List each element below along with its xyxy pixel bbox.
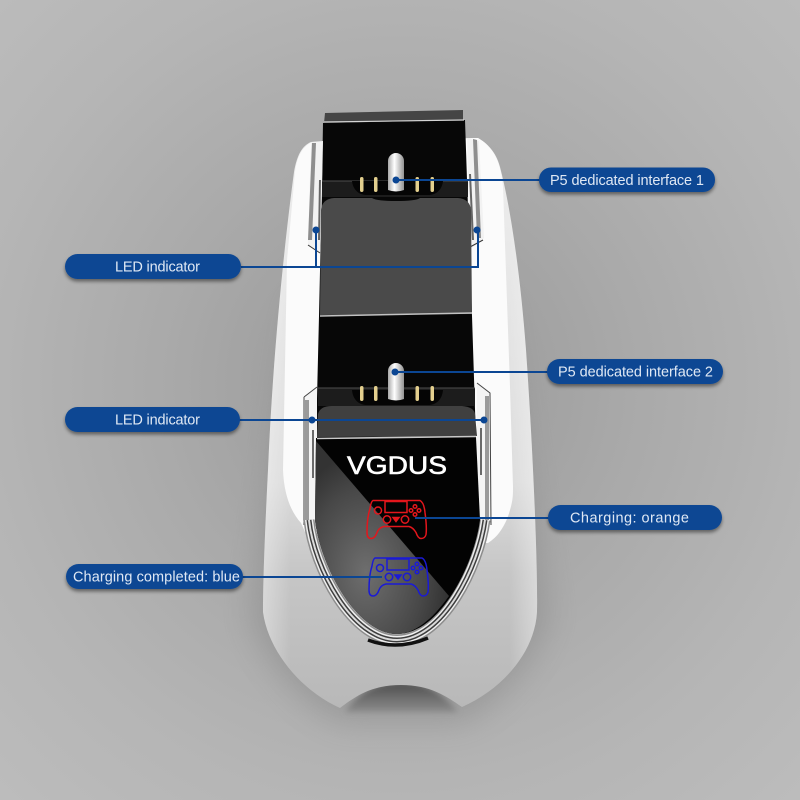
upper pin seat [352,181,443,195]
callout: LED indicator lower: LED indicator [115,412,200,428]
callout: Charging orange [415,505,722,530]
blue controller icon [369,558,428,596]
device shadow [252,300,548,722]
callout: P5 dedicated interface 2 [392,359,723,384]
dock upper shell [283,138,513,543]
black centre column [316,120,476,440]
callout: Charging completed blue [66,564,382,589]
callout: LED indicator upper [65,226,480,279]
callout: P5 dedicated interface 2: P5 dedicated interface 2 [558,364,713,380]
upper charging rail [322,181,468,197]
lower pin seat [352,390,443,405]
callout: P5 dedicated interface 1 [392,168,715,192]
right upper rail [467,138,484,248]
diagonal gray facet [315,441,449,634]
lower pogo pins [360,386,434,401]
callout: LED indicator upper: LED indicator [115,260,200,276]
top cap [324,110,463,123]
lower gray panel [317,406,477,437]
left upper rail [308,141,323,253]
charging dock [263,110,537,708]
red controller icon [367,500,426,538]
lower charging rail [318,388,475,406]
brand logo: VGDUS [347,452,447,480]
black shield [315,437,480,634]
dock base [263,138,537,708]
upper gray panel [320,198,472,315]
left lower guard [303,387,317,525]
right lower guard [477,383,491,525]
upper guide pin [388,153,404,192]
shield chrome ring [309,520,485,645]
callout: P5 dedicated interface 1: P5 dedicated interface 1 [550,173,704,189]
notch shadow [345,682,458,712]
callout: LED indicator lower [65,407,488,432]
lower guide pin [388,363,404,400]
upper pogo pins [360,177,434,192]
callout: Charging completed blue: Charging completed: blue [73,570,240,586]
callout: Charging orange: Charging: orange [570,510,689,526]
